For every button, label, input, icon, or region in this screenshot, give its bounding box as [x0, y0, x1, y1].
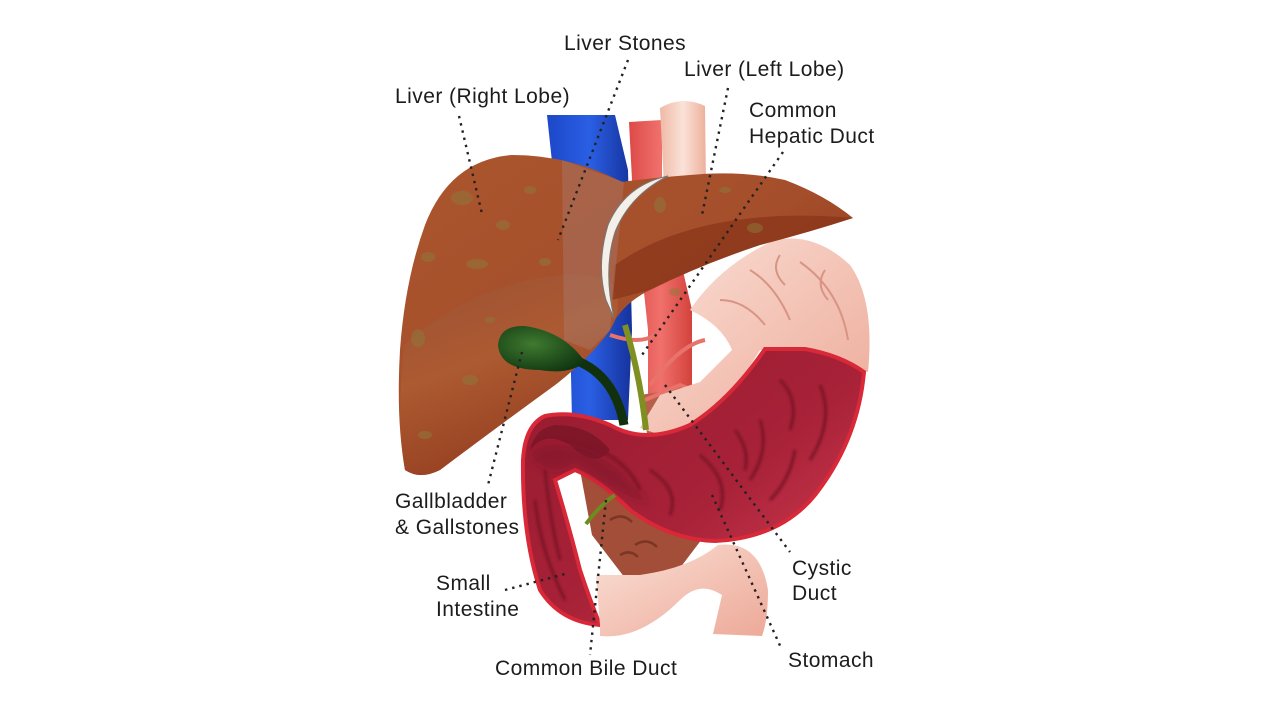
- left lobe lower shading: [612, 216, 853, 300]
- stomach open interior: [523, 349, 864, 625]
- leader lines: [459, 60, 790, 655]
- falciform ligament: [601, 176, 668, 318]
- label: Gallbladder & Gallstones: Gallbladder: [395, 490, 507, 513]
- stomach outer wall: [640, 238, 870, 440]
- label: Common Hepatic Duct: Common: [749, 99, 837, 122]
- common bile duct lower: [586, 495, 615, 524]
- liver: [399, 155, 853, 475]
- aorta: [629, 120, 692, 395]
- label: Stomach: Stomach: [788, 649, 874, 672]
- label: Cystic Duct: Duct: [792, 582, 837, 605]
- label: Common Bile Duct: Common Bile Duct: [495, 657, 677, 680]
- label: Liver (Right Lobe): Liver (Right Lobe): [395, 85, 570, 108]
- vena cava: [547, 115, 632, 420]
- label: Common Hepatic Duct: Hepatic Duct: [749, 125, 875, 148]
- gallbladder: [498, 326, 585, 371]
- cystic and bile ducts: [575, 325, 646, 430]
- pancreas and deep tissue: [580, 382, 725, 578]
- label: Small Intestine: Intestine: [436, 598, 519, 621]
- liver mottling: [411, 186, 763, 439]
- hepatic branches: [610, 335, 705, 400]
- esophagus: [660, 101, 706, 185]
- translucent vein overlay: [562, 160, 624, 350]
- duodenum: [596, 545, 768, 636]
- liver lower surface: [400, 274, 618, 475]
- label: Liver Stones: Liver Stones: [564, 32, 686, 55]
- label: Liver (Left Lobe): Liver (Left Lobe): [684, 58, 845, 81]
- label: Gallbladder & Gallstones: & Gallstones: [395, 516, 519, 539]
- label: Cystic Duct: Cystic: [792, 557, 852, 580]
- label: Small Intestine: Small: [436, 572, 491, 595]
